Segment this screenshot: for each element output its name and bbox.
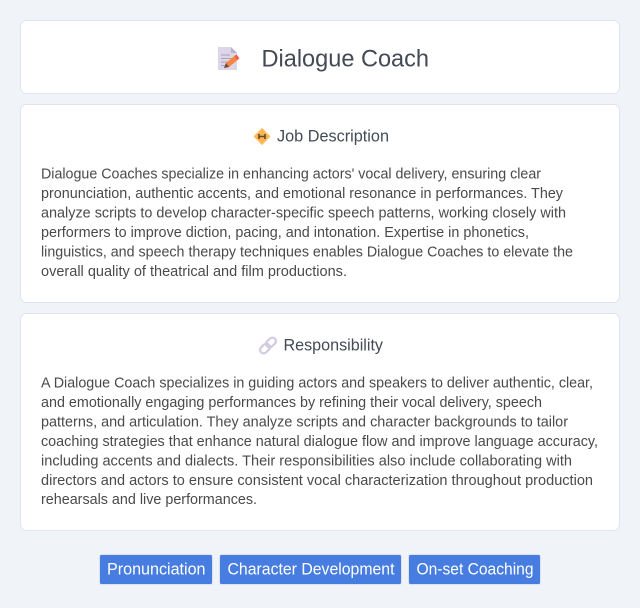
tag: on-set coaching: On-set Coaching [416, 560, 534, 578]
text block: responsibility: rehearsals and live performances. [41, 492, 257, 508]
panel: responsibility [20, 314, 620, 530]
text block: responsibility [41, 376, 598, 508]
tag: pronunciation: Pronunciation [107, 560, 206, 578]
text block: job description [41, 166, 573, 280]
tag: character development [220, 554, 402, 584]
text block: responsibility: directors and actors to ensure consistent vocal characterization throughout production [41, 473, 593, 489]
text block: responsibility: coaching strategies that enhance natural dialogue flow and improve language accuracy, [41, 434, 598, 450]
title: Dialogue Coach [262, 46, 429, 72]
text block: job description: performers to improve diction, pacing, and intonation. Expertise in phonetics, [41, 225, 529, 241]
panel: title card [20, 20, 620, 94]
panel: job description [20, 104, 620, 302]
tag: on-set coaching [408, 554, 540, 584]
text block: responsibility: A Dialogue Coach specializes in guiding actors and speakers to deliver authentic, clear, [41, 376, 593, 392]
icon: diamond road sign [254, 128, 270, 144]
text block: job description: Dialogue Coaches specialize in enhancing actors' vocal delivery, ensuring clear [41, 166, 541, 182]
text block: job description: pronunciation, authentic accents, and emotional resonance in performances. They [41, 186, 564, 202]
heading: job description: Job Description [277, 128, 389, 146]
text block: responsibility: and emotionally engaging performances by refining their vocal delivery, speech [41, 395, 542, 411]
text block: responsibility: including accents and dialects. Their responsibilities also include collaborating with [41, 454, 572, 470]
icon: document with pencil [218, 47, 240, 70]
text block: job description: analyze scripts to develop character-specific speech patterns, working closely with [41, 206, 566, 222]
icon: chain link [259, 336, 277, 355]
text block: responsibility: patterns, and articulation. They analyze scripts and character backgrounds to tailor [41, 414, 568, 430]
tag: pronunciation [100, 554, 212, 584]
tag: character development: Character Development [228, 560, 395, 578]
text block: job description: linguistics, and speech therapy techniques enables Dialogue Coaches to elevate the [41, 244, 573, 260]
heading: responsibility: Responsibility [284, 336, 384, 354]
text block: job description: overall quality of theatrical and film productions. [41, 264, 347, 280]
